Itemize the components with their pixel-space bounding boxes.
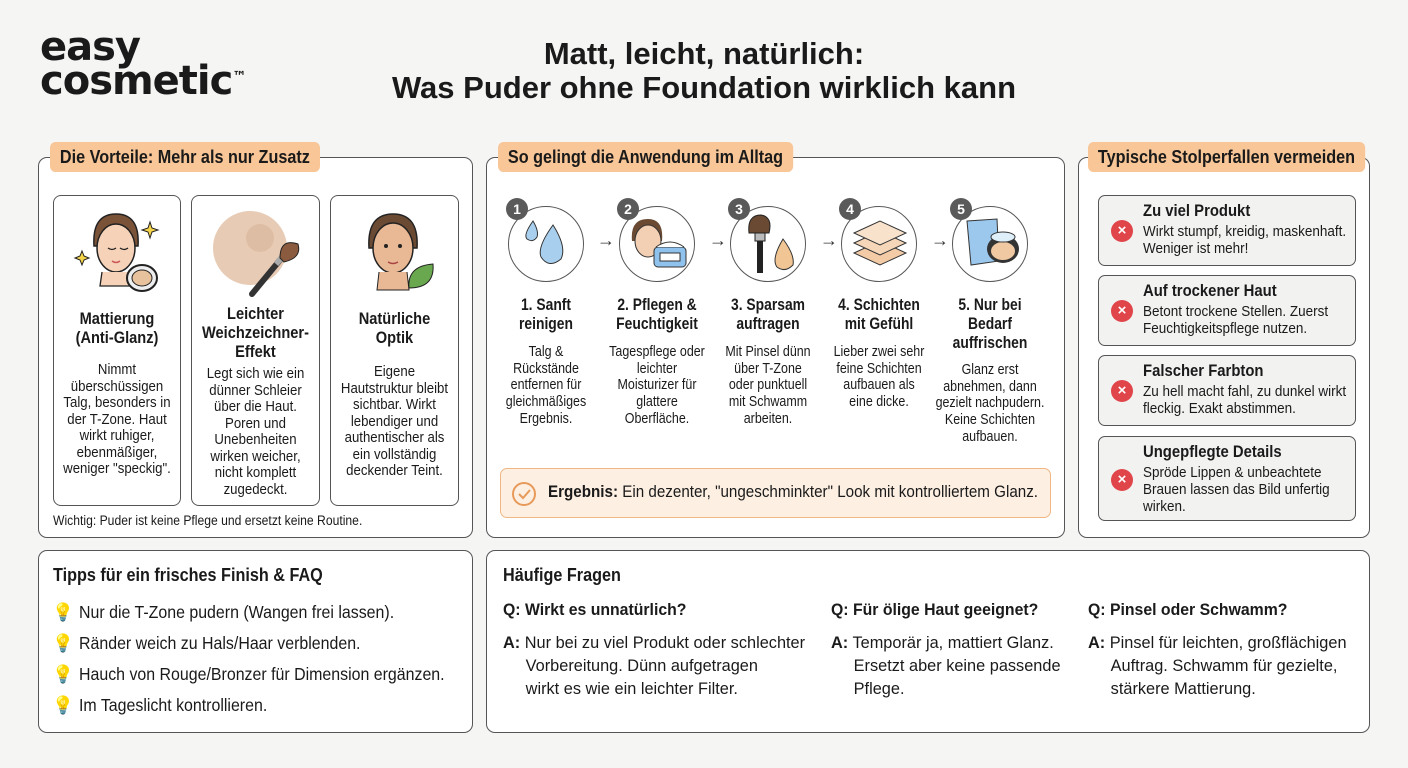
- text: Weichzeichner desc: wirken weicher,: [210, 448, 301, 464]
- icon: face with compact: [74, 213, 160, 292]
- arrow: →: [597, 230, 615, 250]
- text: Mattierung title: Mattierung: [80, 309, 154, 328]
- step 3: mit Schwamm: [729, 394, 807, 410]
- text: Weichzeichner desc: Poren und: [225, 414, 286, 432]
- step 5: 5: [957, 201, 965, 217]
- panel: FAQ: Auftrag. Schwamm für gezielte,: [1111, 656, 1337, 675]
- item: Ungepflegte Details: wirken.: [1143, 499, 1186, 515]
- title: Matt, leicht, natürlich:: [544, 36, 864, 71]
- step 3: 3: [735, 201, 743, 217]
- panel: FAQ: A: Pinsel für leichten, großflächigen: [1088, 633, 1347, 652]
- list: tips: 💡: [52, 602, 74, 622]
- item: Falscher Farbton: ×: [1118, 382, 1126, 399]
- tab: benefits heading: Die Vorteile: Mehr als nur Zusatz: [60, 147, 310, 167]
- step 2: leichter: [637, 361, 677, 377]
- text: Mattierung title: (Anti-Glanz): [76, 328, 158, 347]
- step 1: entfernen für: [511, 377, 581, 393]
- logo: easy: [40, 24, 140, 70]
- step 2: Feuchtigkeit: [616, 315, 698, 333]
- list: tips: Nur die T-Zone pudern (Wangen frei lassen).: [79, 602, 394, 622]
- logo: cosmetic™: [40, 58, 245, 104]
- item: Zu viel Produkt: [1098, 195, 1356, 266]
- text: Weichzeichner desc: [207, 365, 304, 498]
- list: tips: Ränder weich zu Hals/Haar verblenden.: [79, 633, 360, 653]
- item: Falscher Farbton: Falscher Farbton: [1143, 362, 1263, 380]
- text: Natürliche desc: [341, 363, 448, 479]
- faq 3: Q: Pinsel oder Schwamm?: [1088, 600, 1287, 619]
- text: Weichzeichner title: Weichzeichner-: [202, 323, 309, 342]
- text: Mattierung desc: weniger "speckig".: [63, 460, 171, 477]
- step 2: Moisturizer für: [617, 377, 696, 393]
- tab: steps heading: So gelingt die Anwendung im Alltag: [508, 147, 783, 167]
- icon: brush and sponge: [730, 206, 806, 282]
- faq 2: Q: Für ölige Haut geeignet?: [831, 600, 1038, 619]
- panel: FAQ: Ersetzt aber keine passende: [854, 656, 1061, 675]
- logo: [40, 24, 245, 104]
- step 4: aufbauen als: [843, 377, 915, 393]
- text: Natürliche title: Natürliche: [359, 309, 430, 328]
- note: Wichtig: Wichtig: Puder ist keine Pflege und ersetzt keine Routine.: [53, 513, 362, 528]
- card: Mattierung: [53, 195, 181, 506]
- item: Zu viel Produkt: Weniger ist mehr!: [1143, 241, 1248, 257]
- card: Natürliche Optik: [330, 195, 459, 506]
- text: Mattierung desc: der T-Zone. Haut: [67, 410, 167, 428]
- text: Weichzeichner desc: dünner Schleier: [209, 382, 302, 398]
- list: tips: 💡: [52, 695, 74, 715]
- text: Mattierung desc: Nimmt: [98, 361, 136, 378]
- item: Auf trockener Haut: Betont trockene Stellen. Zuerst: [1143, 304, 1328, 320]
- text: Weichzeichner desc: Unebenheiten: [214, 431, 297, 448]
- step 5: abnehmen, dann: [943, 379, 1037, 395]
- list: tips: Im Tageslicht kontrollieren.: [79, 695, 267, 715]
- step 5: aufbauen.: [962, 429, 1018, 445]
- icon: face and cream: [619, 206, 695, 282]
- text: Mattierung desc: überschüssigen: [71, 378, 163, 394]
- text: Natürliche desc: authentischer als: [345, 429, 444, 446]
- icon: layers: [841, 206, 917, 282]
- icon: water drops: [508, 206, 584, 282]
- step 1: [506, 198, 586, 427]
- text: Natürliche desc: sichtbar. Wirkt: [353, 396, 436, 413]
- text: Weichzeichner title: [202, 304, 309, 361]
- step 3: auftragen: [736, 315, 800, 333]
- step 2: Oberfläche.: [625, 411, 689, 427]
- step 2: glattere: [636, 394, 678, 410]
- list: tips: [52, 602, 444, 715]
- panel: application steps: [486, 157, 1065, 538]
- panel: benefits: [38, 157, 473, 538]
- item: Auf trockener Haut: [1098, 275, 1356, 346]
- step 2: 2. Pflegen &: [617, 296, 697, 314]
- list: tips: Hauch von Rouge/Bronzer für Dimension ergänzen.: [79, 664, 444, 684]
- panel: FAQ: wirkt es wie ein leichter Filter.: [526, 679, 738, 698]
- step 1: 1: [513, 201, 521, 217]
- faq 1: Q: Wirkt es unnatürlich?: [503, 600, 686, 619]
- card: Weichzeichner: [191, 195, 320, 506]
- step 4: 4. Schichten: [838, 296, 920, 314]
- step 3: oder punktuell: [729, 377, 807, 393]
- item: Falscher Farbton: Zu hell macht fahl, zu dunkel wirkt: [1143, 384, 1346, 400]
- panel: tips: [38, 550, 473, 733]
- item: Auf trockener Haut: Auf trockener Haut: [1143, 282, 1277, 300]
- panel: FAQ: [486, 550, 1370, 733]
- step 1: gleichmäßiges: [506, 394, 586, 410]
- step 2: Tagespflege oder: [609, 344, 705, 360]
- text: Natürliche title: Optik: [376, 328, 413, 347]
- text: Natürliche title: [359, 309, 430, 347]
- arrow: →: [820, 230, 838, 250]
- text: Mattierung desc: wirkt ruhiger,: [80, 427, 154, 444]
- text: Natürliche desc: Eigene: [374, 363, 415, 380]
- text: Natürliche desc: deckender Teint.: [346, 462, 443, 479]
- step 2: 2: [624, 201, 632, 217]
- step 5: Bedarf: [968, 315, 1012, 333]
- heading: FAQ: Häufige Fragen: [503, 565, 621, 585]
- step 1: Rückstände: [513, 361, 579, 377]
- panel: FAQ: A: Nur bei zu viel Produkt oder schlechter: [503, 633, 805, 652]
- step 4: eine dicke.: [849, 394, 909, 410]
- text: Mattierung title: [76, 309, 158, 347]
- panel: FAQ: A: Temporär ja, mattiert Glanz.: [831, 633, 1054, 652]
- list: tips: 💡: [52, 664, 74, 684]
- list: tips: 💡: [52, 633, 74, 653]
- tab: pitfalls heading: Typische Stolperfallen vermeiden: [1098, 147, 1355, 167]
- step 5: auffrischen: [953, 334, 1027, 352]
- item: Ungepflegte Details: [1098, 436, 1356, 521]
- text: Natürliche desc: ein vollständig: [353, 446, 436, 462]
- text: Natürliche desc: lebendiger und: [351, 412, 438, 430]
- panel: FAQ: stärkere Mattierung.: [1111, 679, 1256, 698]
- text: Mattierung desc: ebenmäßiger,: [77, 444, 157, 460]
- text: Weichzeichner desc: nicht komplett: [215, 464, 296, 481]
- step 3: über T-Zone: [734, 361, 802, 377]
- step 5: [936, 198, 1044, 445]
- text: Mattierung desc: [63, 361, 171, 477]
- text: Weichzeichner desc: zugedeckt.: [224, 480, 287, 498]
- step 1: reinigen: [519, 315, 573, 333]
- text: Mattierung desc: Talg, besonders in: [63, 394, 171, 411]
- tab: benefits heading: [50, 142, 320, 172]
- arrow: →: [709, 230, 727, 250]
- item: Zu viel Produkt: ×: [1118, 222, 1126, 239]
- step 1: Ergebnis.: [520, 411, 572, 427]
- step 4: [834, 198, 924, 410]
- text: Weichzeichner title: Effekt: [235, 342, 276, 361]
- panel: FAQ: Pflege.: [854, 679, 904, 698]
- step 3: [725, 198, 811, 427]
- step 5: gezielt nachpudern.: [936, 395, 1044, 411]
- tab: pitfalls heading: [1088, 142, 1365, 172]
- item: Ungepflegte Details: ×: [1118, 471, 1126, 488]
- item: Auf trockener Haut: Feuchtigkeitspflege nutzen.: [1143, 321, 1307, 337]
- step 3: arbeiten.: [744, 411, 792, 427]
- text: Weichzeichner desc: Legt sich wie ein: [207, 365, 304, 382]
- step 5: 5. Nur bei: [958, 296, 1022, 314]
- item: Ungepflegte Details: Ungepflegte Details: [1143, 443, 1282, 461]
- panel: pitfalls: [1078, 157, 1370, 538]
- step 3: 3. Sparsam: [731, 296, 805, 314]
- step 4: Lieber zwei sehr: [834, 344, 924, 360]
- callout: Ergebnis: [500, 468, 1051, 518]
- tab: steps heading: [498, 142, 793, 172]
- panel: FAQ: Vorbereitung. Dünn aufgetragen: [526, 656, 758, 675]
- arrow: →: [931, 230, 949, 250]
- icon: powder circle with brush: [213, 211, 300, 297]
- step 5: Keine Schichten: [945, 412, 1035, 428]
- item: Zu viel Produkt: Wirkt stumpf, kreidig, maskenhaft.: [1143, 224, 1346, 240]
- item: Falscher Farbton: fleckig. Exakt abstimmen.: [1143, 401, 1296, 417]
- icon: check circle: [512, 482, 536, 506]
- step 5: Glanz erst: [962, 362, 1018, 378]
- icon: blotting paper and compact: [952, 206, 1028, 282]
- item: Auf trockener Haut: ×: [1118, 302, 1126, 319]
- callout: Ergebnis: Ergebnis: Ein dezenter, "ungeschminkter" Look mit kontrolliertem Glanz.: [548, 483, 1038, 501]
- step 1: Talg &: [529, 344, 563, 360]
- step 4: 4: [846, 201, 854, 217]
- item: Falscher Farbton: [1098, 355, 1356, 426]
- text: Weichzeichner title: Leichter: [227, 304, 284, 323]
- title: [392, 36, 1016, 105]
- item: Ungepflegte Details: Brauen lassen das Bild unfertig: [1143, 482, 1330, 498]
- text: Weichzeichner desc: über die Haut.: [214, 398, 297, 415]
- step 4: mit Gefühl: [845, 315, 913, 333]
- step 4: feine Schichten: [836, 361, 922, 377]
- title: Was Puder ohne Foundation wirklich kann: [392, 70, 1016, 105]
- icon: face with leaf: [368, 213, 434, 290]
- step 2: [609, 198, 705, 427]
- text: Natürliche desc: Hautstruktur bleibt: [341, 380, 448, 396]
- item: Zu viel Produkt: Zu viel Produkt: [1143, 202, 1250, 220]
- step 3: Mit Pinsel dünn: [725, 344, 811, 360]
- step 1: 1. Sanft: [521, 296, 571, 314]
- heading: tips: Tipps für ein frisches Finish & FAQ: [53, 565, 323, 585]
- item: Ungepflegte Details: Spröde Lippen & unbeachtete: [1143, 465, 1321, 481]
